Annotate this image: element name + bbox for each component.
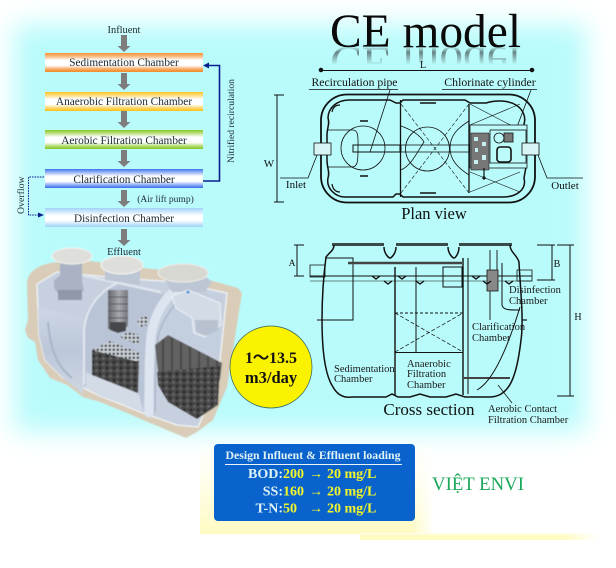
chamber labels: Aerobic Contact xyxy=(488,404,557,415)
dimension L xyxy=(319,60,534,72)
tank outline xyxy=(321,94,535,202)
left chamber xyxy=(327,105,400,192)
inlet connector: Inlet xyxy=(286,179,306,191)
label: influent: Influent xyxy=(108,25,141,36)
cross section drawing xyxy=(289,244,582,426)
row SS xyxy=(263,484,376,500)
dimension B xyxy=(537,245,561,280)
chamber: aerobic filtration: Aerobic Filtration Chamber xyxy=(61,135,187,147)
arrow: anaerobic to aerobic xyxy=(118,111,130,128)
chamber: disinfection: Disinfection Chamber xyxy=(74,213,174,225)
middle chamber shading xyxy=(84,282,165,410)
chamber labels: Clarification xyxy=(472,322,526,333)
inlet connector xyxy=(280,143,331,191)
chamber labels: Sedimentation xyxy=(334,364,395,375)
tank 3D illustration xyxy=(25,248,242,438)
chamber: clarification: Clarification Chamber xyxy=(73,174,175,186)
table heading: Design Influent & Effluent loading xyxy=(225,448,401,462)
capacity badge xyxy=(230,326,312,408)
chamber labels: Filtration Chamber xyxy=(488,415,569,426)
middle chamber floor xyxy=(86,372,143,411)
row BOD: BOD: xyxy=(248,467,283,482)
middle chamber xyxy=(401,103,470,193)
label: air lift pump: (Air lift pump) xyxy=(137,194,194,205)
dimension W: W xyxy=(264,158,275,170)
outlet connector: Outlet xyxy=(551,180,579,192)
label: chlorinate cylinder xyxy=(442,75,537,140)
label: recirculation pipe xyxy=(309,76,398,152)
row T-N: T-N: xyxy=(256,502,283,516)
arrow: disinfection to effluent xyxy=(118,229,130,246)
chamber labels xyxy=(334,285,569,426)
row T-N: 50 xyxy=(283,502,297,516)
chamber: disinfection xyxy=(45,208,203,227)
label: recirculation pipe: Recirculation pipe xyxy=(311,76,398,89)
title xyxy=(330,5,521,89)
left chamber inner wall curve xyxy=(48,322,72,378)
plan view drawing xyxy=(264,60,583,223)
title: CE model xyxy=(330,5,521,58)
row BOD: → xyxy=(309,467,323,482)
row T-N xyxy=(256,502,376,516)
arrow: clarification to disinfection xyxy=(118,190,130,207)
row T-N: 20 mg/L xyxy=(327,502,376,516)
chamber: clarification xyxy=(45,169,203,188)
label: plan view: Plan view xyxy=(401,204,467,223)
arrow: aerobic to clarification xyxy=(118,150,130,167)
tank arches xyxy=(73,273,188,413)
tank inner cavity xyxy=(37,272,227,427)
dimension H xyxy=(557,245,582,396)
row SS: 20 mg/L xyxy=(327,484,376,500)
filter grids xyxy=(92,315,148,362)
dimension L: L xyxy=(420,60,426,71)
label: chlorinate cylinder: Chlorinate cylinder xyxy=(444,75,536,89)
outlet connector xyxy=(522,143,583,192)
dimension B: B xyxy=(554,259,561,270)
capacity badge: m3/day xyxy=(245,368,298,387)
right chamber equipment xyxy=(470,104,527,192)
dimension H: H xyxy=(574,312,582,323)
tank necks and lids xyxy=(52,248,212,300)
chamber: aerobic filtration xyxy=(45,130,203,149)
capacity badge: 1～13.5 xyxy=(245,350,297,367)
chamber labels: Anaerobic xyxy=(407,359,451,370)
arrow: overflow xyxy=(28,177,44,218)
arrow: influent down xyxy=(118,35,130,52)
chamber labels: Chamber xyxy=(407,380,446,391)
row BOD: 200 xyxy=(283,467,304,482)
chamber: sedimentation: Sedimentation Chamber xyxy=(69,57,179,69)
chamber: anaerobic filtration: Anaerobic Filtration Chamber xyxy=(56,96,192,108)
loading table xyxy=(214,444,415,521)
flow diagram xyxy=(16,25,237,258)
tank outer shell xyxy=(25,260,242,438)
chamber: anaerobic filtration xyxy=(45,92,203,111)
dimension A xyxy=(289,245,304,276)
chamber labels: Chamber xyxy=(334,374,373,385)
arrow: sedimentation to anaerobic xyxy=(118,73,130,90)
chamber labels: Disinfection xyxy=(509,285,562,296)
row SS: → xyxy=(309,484,323,500)
right filtration media block xyxy=(155,335,222,419)
central pipe column xyxy=(108,290,128,333)
dimension A: A xyxy=(289,259,296,269)
row BOD xyxy=(248,467,376,482)
title reflection: CE model xyxy=(330,36,521,89)
left filtration media xyxy=(92,350,139,393)
chamber labels: Filtration xyxy=(407,369,447,380)
row T-N: → xyxy=(309,502,323,516)
label: nitrified recirculation: Nitrified recirculation xyxy=(226,79,237,163)
dimension W xyxy=(264,95,284,202)
chamber labels: Chamber xyxy=(472,333,511,344)
label: cross section: Cross section xyxy=(383,400,475,419)
label: overflow: Overflow xyxy=(16,176,27,214)
row SS: 160 xyxy=(283,484,304,500)
tank body xyxy=(322,245,522,397)
pump unit xyxy=(172,290,221,337)
chamber labels: Chamber xyxy=(509,296,548,307)
row SS: SS: xyxy=(263,484,283,500)
left chamber lower wall xyxy=(38,307,83,394)
row BOD: 20 mg/L xyxy=(327,467,376,482)
right chamber upper wall xyxy=(160,290,222,356)
brand label: VIỆT ENVI xyxy=(432,473,524,495)
arrow: nitrified recirculation xyxy=(203,62,220,181)
chamber: sedimentation xyxy=(45,53,203,72)
label: effluent: Effluent xyxy=(107,247,141,258)
chamber walls xyxy=(310,250,532,403)
